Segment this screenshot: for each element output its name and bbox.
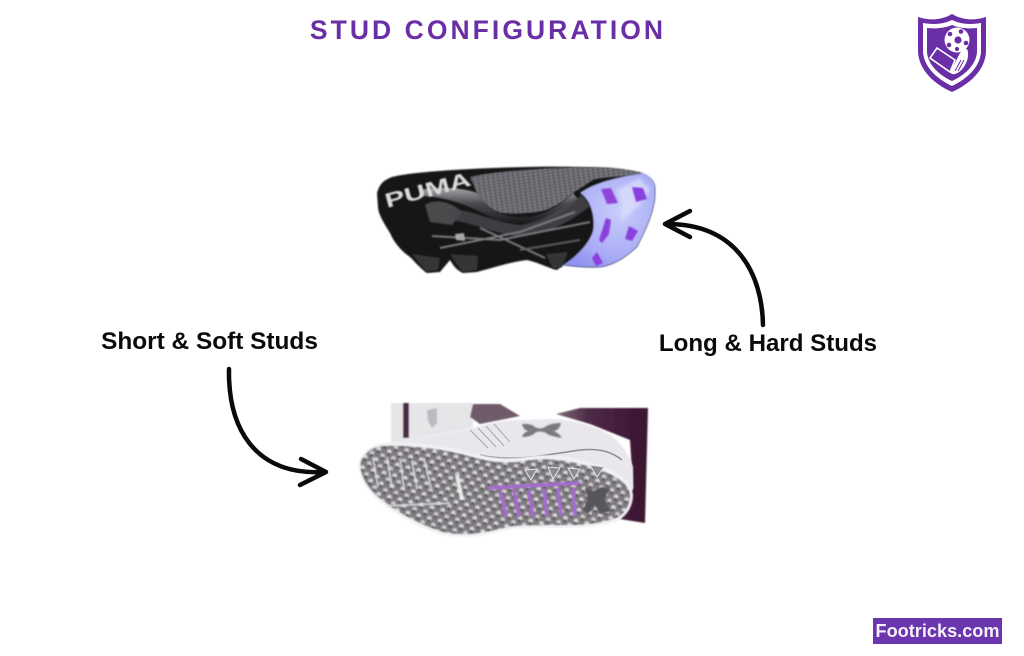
boot silhouette [377, 167, 655, 273]
label: long and hard studs: Long & Hard Studs [659, 330, 877, 357]
boot rear studs [412, 252, 568, 272]
boot: long and hard studs [377, 167, 655, 273]
shoe heel grooves [373, 457, 462, 506]
shoe outsole studs [361, 446, 630, 534]
boot brand lettering: PUMA [383, 169, 473, 213]
boot toe plate [563, 173, 655, 267]
shoe: short and soft studs [359, 403, 648, 537]
shoe outsole rim [359, 442, 633, 537]
shoe forefoot logo [583, 487, 611, 514]
arrow: to short studs [229, 369, 326, 485]
boot glossy band [420, 188, 578, 223]
shoe midsole dents [525, 465, 604, 480]
icon: boot and card [930, 48, 968, 74]
shoe upper stitching [470, 424, 622, 460]
shoe purple grooves [488, 483, 580, 517]
boot purple studs [592, 187, 647, 266]
arrow: to long studs [665, 211, 763, 325]
label: short and soft studs: Short & Soft Studs [101, 328, 318, 355]
boot knit upper [470, 167, 643, 214]
badge: footricks: Footricks.com [876, 621, 1000, 641]
shoe upper [391, 419, 633, 490]
icon: shield logo [918, 14, 986, 92]
shoe background photo patch [391, 403, 648, 523]
icon: football [944, 28, 970, 52]
boot sole details [425, 195, 590, 258]
title: STUD CONFIGURATION [310, 15, 666, 45]
shoe logo [522, 423, 562, 438]
